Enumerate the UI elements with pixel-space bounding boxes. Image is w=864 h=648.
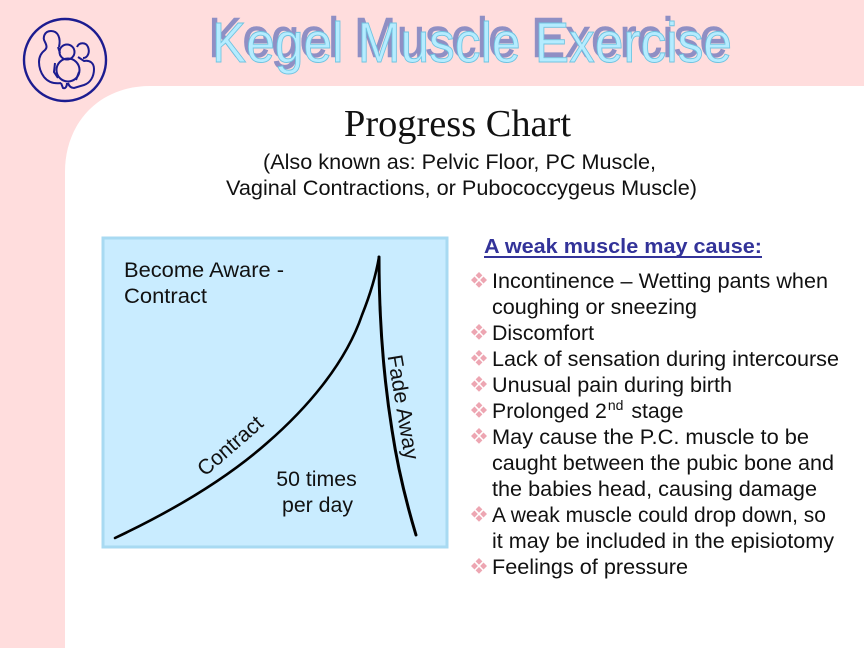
list text: the babies head, causing damage	[492, 477, 817, 501]
list text: Lack of sensation during intercourse	[492, 347, 839, 371]
label: 50 times per day: 50 times	[276, 467, 357, 491]
list text: stage	[625, 399, 683, 423]
label: 50 times per day: per day	[282, 493, 353, 517]
heading: A weak muscle may cause: A weak muscle may cause:	[484, 235, 762, 258]
label: Become Aware - Contract	[124, 258, 284, 308]
list text: May cause the P.C. muscle to be	[492, 425, 809, 449]
list text: coughing or sneezing	[492, 295, 697, 319]
panel: progress chart	[103, 238, 447, 547]
subtitle: (Also known as: Pelvic Floor, PC Muscle,	[263, 150, 656, 174]
title: Kegel Muscle Exercise: Kegel Muscle Exercise	[212, 11, 732, 75]
bullet list: symptoms	[471, 269, 839, 579]
label: Contract: Contract	[193, 411, 268, 481]
list text: nd	[608, 397, 623, 413]
label: Become Aware - Contract: Contract	[124, 284, 207, 308]
label: Become Aware - Contract: Become Aware -	[124, 258, 284, 282]
list text: Discomfort	[492, 321, 594, 345]
label: Fade Away: Fade Away	[383, 353, 424, 462]
subtitle	[226, 150, 697, 200]
icon: mother and child logo	[24, 19, 106, 101]
list text	[492, 269, 839, 579]
list text: Feelings of pressure	[492, 555, 688, 579]
list text: Unusual pain during birth	[492, 373, 732, 397]
heading: Progress Chart: Progress Chart	[344, 103, 571, 145]
list text: Prolonged 2	[492, 399, 607, 423]
bullet markers	[471, 272, 487, 574]
list text: caught between the pubic bone and	[492, 451, 834, 475]
label: 50 times per day	[276, 467, 357, 517]
title: Kegel Muscle Exercise: Kegel Muscle Exercise	[208, 6, 728, 70]
list text: A weak muscle could drop down, so	[492, 503, 826, 527]
curve: contraction and fade away	[115, 257, 416, 538]
list text: it may be included in the episiotomy	[492, 529, 834, 553]
subtitle: Vaginal Contractions, or Pubococcygeus Muscle)	[226, 176, 697, 200]
list text: Incontinence – Wetting pants when	[492, 269, 828, 293]
